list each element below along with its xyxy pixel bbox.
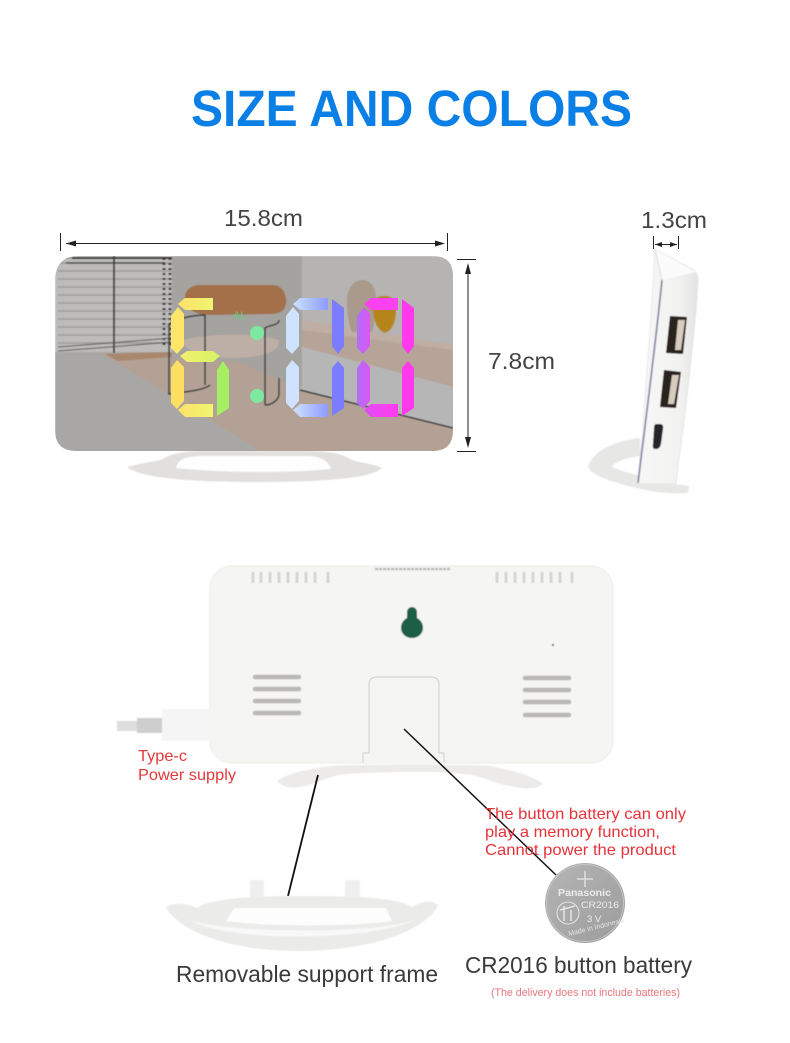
battery icon CR2016: Made in Indonesia [568, 917, 625, 938]
label: Type-c power supply [138, 748, 236, 784]
side vents left [255, 677, 299, 713]
infographic canvas [55, 90, 706, 998]
colon dots and AL indicator: AL [233, 310, 246, 322]
leader line to battery [404, 729, 556, 875]
battery icon CR2016: Panasonic [558, 888, 611, 899]
battery icon CR2016: 3 V [587, 914, 602, 925]
label: Type-c power supply: Power supply [138, 767, 236, 784]
label: battery note: Cannot power the product [485, 842, 677, 859]
clock side view [588, 249, 698, 493]
back support foot [277, 764, 543, 788]
keyhole [401, 607, 423, 638]
colon dots and AL indicator [233, 310, 264, 403]
battery icon CR2016: CR2016 [581, 900, 619, 911]
note: batteries not included: (The delivery does not include batteries) [491, 987, 680, 999]
label: Type-c power supply: Type-c [138, 748, 187, 765]
width dimension: 15.8cm [60, 205, 448, 251]
label: battery note [485, 806, 686, 859]
width dimension: 15.8cm: 15.8cm [224, 205, 303, 231]
side view stand [588, 438, 689, 493]
leader line to support frame [288, 775, 318, 896]
battery icon CR2016 [545, 863, 625, 943]
top vents right [497, 572, 572, 583]
small dot [552, 644, 554, 646]
top vents left [253, 572, 328, 583]
caption: CR2016 button battery: CR2016 button battery [465, 952, 692, 978]
digit 0 blue [286, 298, 344, 417]
model text strip [375, 568, 450, 570]
side view body [638, 249, 698, 484]
mirror reflected room scene [55, 256, 456, 452]
clock front mirror display [55, 256, 456, 452]
height dimension: 7.8cm: 7.8cm [488, 348, 555, 374]
depth dimension: 1.3cm [641, 207, 707, 249]
USB port upper [666, 316, 687, 354]
digit 0 pink [357, 298, 414, 417]
USB-C port [653, 424, 663, 449]
USB-C cable [117, 709, 212, 741]
depth dimension: 1.3cm: 1.3cm [641, 207, 707, 233]
clock back body [210, 566, 613, 763]
clock front stand [127, 451, 382, 482]
digit 6 [171, 298, 229, 417]
caption: removable support frame: Removable support frame [176, 961, 438, 987]
height dimension: 7.8cm [457, 260, 555, 452]
title: SIZE AND COLORS [191, 80, 632, 137]
label: battery note: play a memory function, [485, 824, 660, 841]
kickstand outline [363, 677, 444, 763]
label: battery note: The button battery can only [485, 806, 686, 823]
USB port lower [660, 370, 681, 408]
side vents right [525, 678, 569, 715]
removable support frame piece [166, 880, 438, 951]
